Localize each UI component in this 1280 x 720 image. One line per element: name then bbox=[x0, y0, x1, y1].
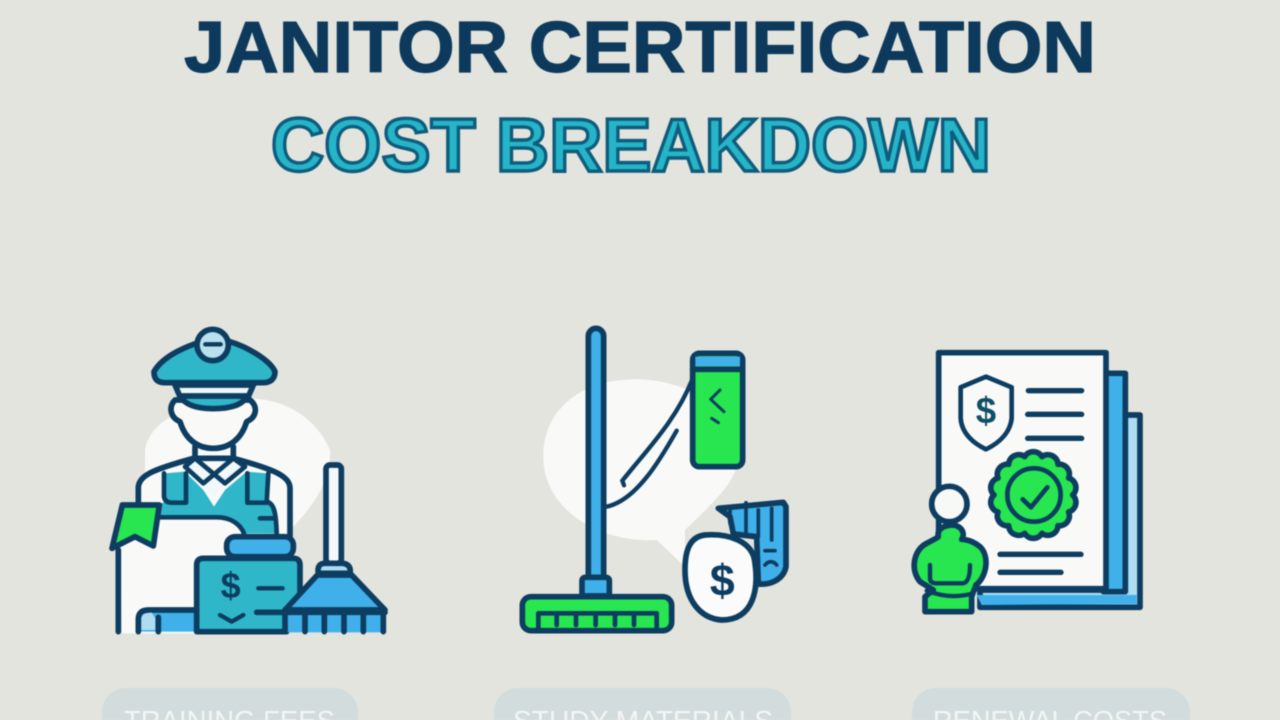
seal badge bbox=[991, 452, 1076, 538]
title line 2: COST BREAKDOWN bbox=[271, 103, 991, 187]
bottle cap line bbox=[693, 361, 743, 378]
cleaner bottle bbox=[693, 353, 743, 467]
cap crown bbox=[154, 342, 275, 383]
jar bbox=[197, 537, 300, 632]
bristle lines bbox=[257, 612, 385, 632]
neck bbox=[195, 447, 233, 460]
person head bbox=[932, 486, 967, 522]
flag pole bbox=[110, 550, 127, 632]
shield bbox=[961, 377, 1012, 449]
label pill: study materials bbox=[494, 688, 791, 720]
overalls bbox=[158, 472, 276, 533]
icon: mop, bottle and money bag bbox=[522, 328, 786, 631]
person bbox=[914, 486, 986, 612]
front sheet bbox=[939, 353, 1106, 589]
strap detail lines bbox=[730, 503, 777, 565]
mop teeth bbox=[538, 613, 657, 628]
middle sheet frame bbox=[1103, 373, 1125, 592]
shield dollar sign: $ bbox=[976, 390, 996, 431]
mop collar bbox=[582, 577, 609, 596]
jar body bbox=[197, 558, 300, 632]
mop pole bbox=[588, 328, 604, 582]
seal scalloped edge bbox=[991, 452, 1076, 538]
collar folds bbox=[185, 458, 245, 483]
icon: janitor with cleaning supplies bbox=[112, 329, 385, 633]
jar dollar sign: $ bbox=[221, 565, 241, 606]
broom bbox=[257, 465, 385, 632]
cap badge dash bbox=[205, 338, 221, 351]
person body bbox=[914, 525, 986, 612]
broom bristles bbox=[285, 612, 385, 632]
cap band bbox=[175, 385, 253, 397]
jar label marks bbox=[220, 588, 283, 622]
bottle body bbox=[693, 353, 743, 467]
bag back strap bbox=[718, 502, 786, 584]
speech bubble background bbox=[543, 379, 740, 567]
hose curves bbox=[607, 378, 693, 507]
broom head bbox=[285, 575, 385, 610]
seal check mark bbox=[1023, 487, 1047, 507]
overall straps bbox=[160, 473, 277, 533]
seal inner ring bbox=[1007, 468, 1061, 522]
head bbox=[171, 400, 255, 448]
mop head bbox=[522, 597, 672, 631]
broom handle bbox=[326, 465, 341, 563]
bag body bbox=[685, 535, 756, 620]
money bag bbox=[685, 502, 786, 620]
cap visor bbox=[180, 396, 247, 409]
broom collar bbox=[318, 563, 350, 573]
title line 1: JANITOR CERTIFICATION bbox=[184, 8, 1096, 88]
middle sheet bbox=[977, 595, 1137, 605]
label pill: training fees bbox=[102, 688, 358, 720]
collar bbox=[185, 458, 245, 497]
body and shoulders bbox=[138, 458, 290, 537]
background blob bbox=[120, 398, 330, 633]
small book bbox=[138, 610, 198, 632]
text lines bbox=[1000, 391, 1082, 572]
book spine bbox=[150, 617, 167, 632]
green flag bbox=[112, 505, 159, 548]
bag dollar sign: $ bbox=[710, 556, 735, 605]
label pill: renewal costs bbox=[912, 688, 1190, 720]
bottle label marks bbox=[711, 390, 724, 423]
bottle cap band bbox=[695, 357, 740, 366]
person arms bbox=[927, 565, 973, 596]
title bbox=[184, 8, 1096, 187]
cap badge bbox=[197, 329, 228, 361]
icon: renewal certificate documents bbox=[914, 353, 1140, 612]
back sheet bbox=[980, 415, 1140, 607]
jar lid bbox=[227, 537, 293, 557]
